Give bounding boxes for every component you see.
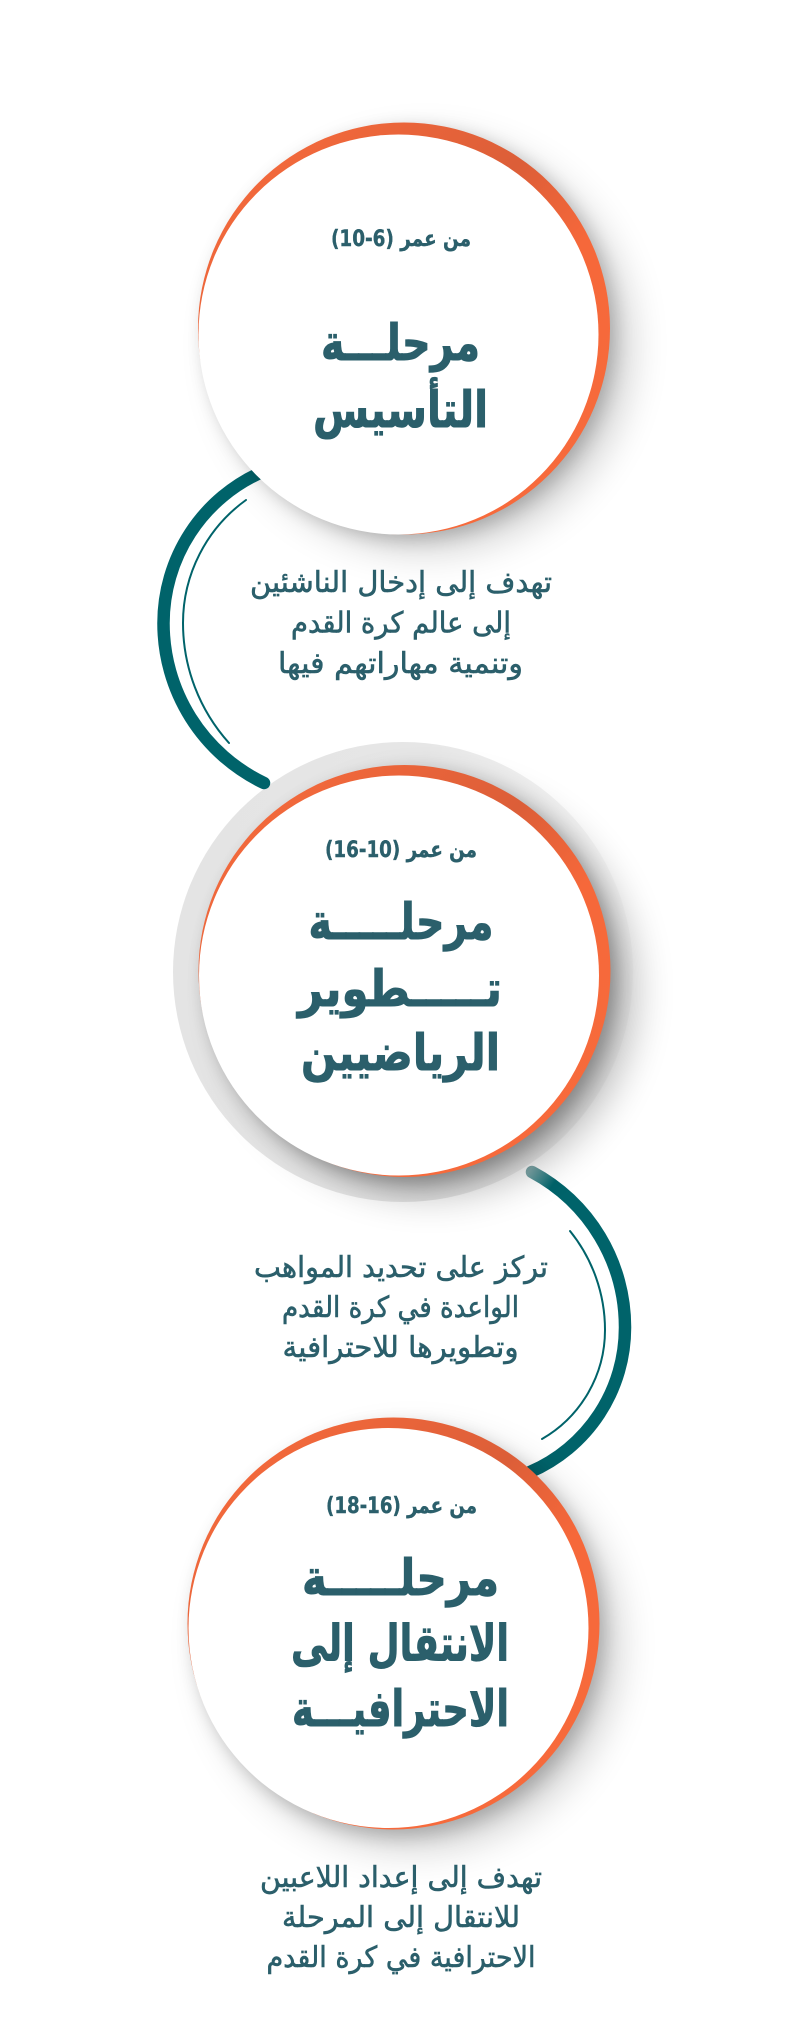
age label: من عمر (6-10) (331, 227, 471, 252)
text block: stage three description: تهدف إلى إعداد اللاعبين (260, 1860, 542, 1895)
text block: stage three description: الاحترافية في كرة القدم (266, 1940, 536, 1975)
text block: stage one description: تهدف إلى إدخال الناشئين (250, 565, 552, 600)
text block: stage one description: إلى عالم كرة القدم (291, 606, 511, 640)
panel: stage one circle (198, 122, 629, 549)
text block: stage two description: الواعدة في كرة القدم (282, 1290, 519, 1325)
heading: stage two: الرياضيين (301, 1024, 500, 1083)
text block: stage three description: للانتقال إلى المرحلة (282, 1900, 520, 1935)
text block: stage three description (260, 1860, 542, 1975)
text block: stage two description: تركز على تحديد المواهب (254, 1250, 548, 1284)
text block: stage one description (250, 565, 552, 681)
panel: stage three circle (188, 1418, 617, 1847)
heading: stage two: تـــــطوير (295, 960, 502, 1019)
heading: stage three (291, 1549, 509, 1739)
heading: stage one: التأسيس (313, 377, 488, 439)
text block: stage two description: وتطويرها للاحترافية (282, 1330, 518, 1364)
panel: stage two circle (198, 765, 634, 1194)
arc connector: stage one to stage two (163, 472, 264, 783)
heading: stage two: مرحلـــــة (308, 893, 494, 952)
heading: stage three: مرحلـــــة (302, 1549, 499, 1608)
arc connector: stage two to stage three (530, 1172, 625, 1472)
heading: stage one (313, 314, 488, 439)
heading: stage one: مرحلـــة (321, 314, 480, 373)
grey halo ring behind stage two (173, 742, 633, 1202)
age label: من عمر (10-16) (325, 838, 477, 863)
text block: stage one description: وتنمية مهاراتهم فيها (278, 646, 523, 681)
text block: stage two description (254, 1250, 548, 1364)
heading: stage three: الاحترافيـــة (292, 1680, 509, 1739)
heading: stage two (295, 893, 502, 1083)
age label: من عمر (16-18) (326, 1494, 477, 1519)
heading: stage three: الانتقال إلى (291, 1614, 509, 1674)
